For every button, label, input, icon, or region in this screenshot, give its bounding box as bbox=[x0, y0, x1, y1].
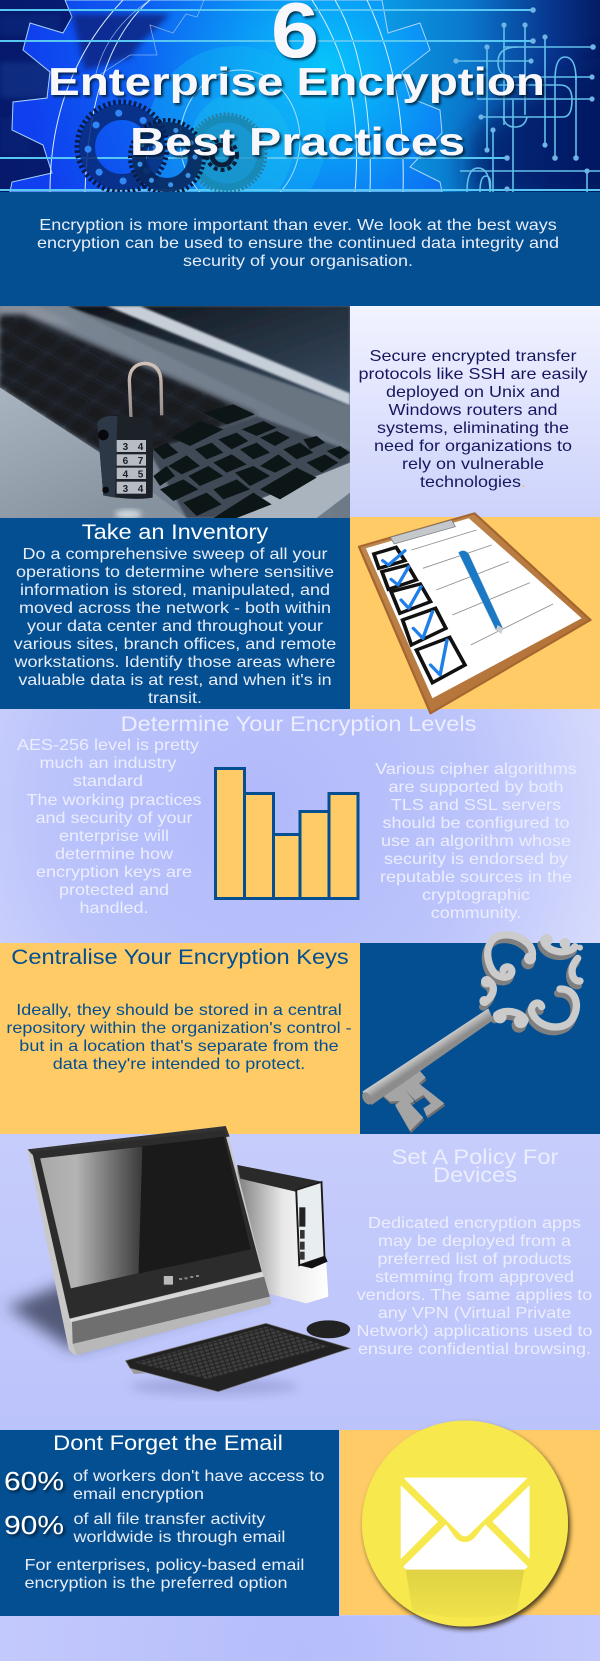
left text continued bbox=[27, 791, 201, 917]
stat: 60%: 60% bbox=[4, 1466, 64, 1496]
closing text: For enterprises, policy-based email bbox=[24, 1556, 304, 1574]
heading: Take an Inventory bbox=[82, 520, 269, 544]
body text: repository within the organization's control - bbox=[6, 1019, 352, 1037]
right text: reputable sources in the bbox=[380, 868, 572, 886]
closing text bbox=[24, 1556, 304, 1592]
bar chart bbox=[216, 768, 358, 898]
stat: 60% bbox=[4, 1466, 324, 1503]
keyboard bbox=[126, 1323, 350, 1392]
panel: email icon background bbox=[340, 1430, 600, 1615]
left text continued: and security of your bbox=[36, 809, 193, 827]
panel: take an inventory bbox=[0, 518, 350, 709]
right text: TLS and SSL servers bbox=[391, 796, 561, 814]
body text: workstations. Identify those areas where bbox=[13, 653, 335, 671]
stat: 90%: of all file transfer activity bbox=[74, 1510, 266, 1528]
right text bbox=[375, 760, 577, 922]
left text: much an industry bbox=[40, 754, 177, 772]
body text: transit. bbox=[148, 689, 202, 707]
icon: padlock: 34 bbox=[123, 442, 144, 453]
heading: Dont Forget the Email bbox=[53, 1431, 283, 1455]
panel: intro bbox=[0, 192, 600, 306]
intro text: encryption can be used to ensure the continued data integrity and bbox=[37, 234, 559, 252]
body text: operations to determine where sensitive bbox=[16, 563, 334, 581]
panel: centralise keys bbox=[0, 943, 360, 1134]
panel: encrypted transfer text bbox=[350, 306, 600, 518]
title: Best Practices bbox=[130, 121, 465, 164]
hero banner bbox=[0, 0, 600, 192]
bright edge streak bbox=[107, 306, 350, 405]
right text: Various cipher algorithms bbox=[375, 760, 577, 778]
right text: are supported by both bbox=[389, 778, 563, 796]
heading: Determine Your Encryption Levels bbox=[121, 712, 476, 736]
stat: 90% bbox=[4, 1510, 285, 1546]
body text bbox=[6, 1001, 352, 1073]
stat: 90%: worldwide is through email bbox=[72, 1528, 285, 1546]
left text continued: protected and bbox=[59, 881, 169, 899]
icon: envelope badge bbox=[362, 1420, 568, 1626]
intro text bbox=[37, 216, 559, 270]
body text: stemming from approved bbox=[375, 1268, 574, 1286]
body text: your data center and throughout your bbox=[27, 617, 323, 635]
stat: 60%: email encryption bbox=[73, 1485, 204, 1503]
body text: may be deployed from a bbox=[378, 1232, 572, 1250]
blurred keyboard bbox=[0, 314, 257, 453]
icon: large gear bbox=[10, 0, 442, 192]
body text bbox=[357, 1214, 592, 1358]
body text: any VPN (Virtual Private bbox=[378, 1304, 571, 1322]
mouse bbox=[307, 1320, 350, 1338]
body text: Do a comprehensive sweep of all your bbox=[23, 545, 328, 563]
icon: padlock: 67 bbox=[123, 456, 144, 467]
icon: small dark gears bbox=[77, 102, 266, 194]
panel: encrypted transfer text: need for organizations to bbox=[374, 437, 572, 455]
heading bbox=[392, 1145, 559, 1187]
left text continued: The working practices bbox=[27, 791, 201, 809]
body text: Network) applications used to bbox=[357, 1322, 592, 1340]
body text: data they're intended to protect. bbox=[53, 1055, 305, 1073]
body text: various sites, branch offices, and remote bbox=[14, 635, 336, 653]
sharp key well bbox=[150, 416, 350, 518]
panel: encrypted transfer text: deployed on Unix and bbox=[386, 383, 560, 401]
icon: padlock: 45 bbox=[123, 469, 144, 480]
heading: Centralise Your Encryption Keys bbox=[11, 945, 349, 969]
body text: information is stored, manipulated, and bbox=[20, 581, 330, 599]
body text: vendors. The same applies to bbox=[357, 1286, 592, 1304]
body text: ensure confidential browsing. bbox=[358, 1340, 591, 1358]
left text continued: enterprise will bbox=[59, 827, 169, 845]
panel: padlock photo bbox=[0, 306, 350, 519]
tower bbox=[237, 1165, 328, 1303]
left text continued: determine how bbox=[55, 845, 174, 863]
laptop lid bbox=[67, 306, 350, 406]
dark bottom right bbox=[470, 60, 600, 205]
right text: cryptographic bbox=[422, 886, 530, 904]
icon: clipboard bbox=[359, 513, 591, 713]
icon: padlock bbox=[97, 363, 162, 499]
body text: but in a location that's separate from the bbox=[19, 1037, 339, 1055]
body text bbox=[13, 545, 336, 707]
body text: moved across the network - both within bbox=[19, 599, 331, 617]
right text: security is endorsed by bbox=[384, 850, 568, 868]
panel: encrypted transfer text: Secure encrypted transfer bbox=[370, 347, 577, 365]
panel: determine encryption levels bbox=[0, 709, 600, 943]
body text: Ideally, they should be stored in a central bbox=[16, 1001, 342, 1019]
left text bbox=[17, 736, 199, 790]
intro text: Encryption is more important than ever. We look at the best ways bbox=[39, 216, 557, 234]
body text: valuable data is at rest, and when it's in bbox=[18, 671, 332, 689]
panel: encrypted transfer text: rely on vulnerable bbox=[402, 455, 544, 473]
body text: preferred list of products bbox=[378, 1250, 571, 1268]
left text: standard bbox=[73, 772, 143, 790]
circuit lines bbox=[455, 25, 600, 192]
monitor bbox=[28, 1126, 270, 1355]
right text: should be configured to bbox=[383, 814, 569, 832]
panel: encrypted transfer text: systems, eliminating the bbox=[377, 419, 569, 437]
icon: key bbox=[360, 934, 583, 1133]
title bbox=[48, 0, 545, 164]
heading: Devices bbox=[433, 1163, 517, 1187]
left text: AES-256 level is pretty bbox=[17, 736, 199, 754]
closing text: encryption is the preferred option bbox=[24, 1574, 287, 1592]
bottom band bbox=[0, 1616, 600, 1661]
panel: set a policy for devices bbox=[0, 1134, 600, 1430]
left text continued: handled. bbox=[79, 899, 149, 917]
heading: Set A Policy For bbox=[392, 1145, 559, 1169]
panel: key bbox=[360, 934, 600, 1134]
stat: 60%: of workers don't have access to bbox=[73, 1467, 324, 1485]
icon: padlock: 34 bbox=[123, 484, 144, 495]
panel: dont forget the email bbox=[0, 1430, 339, 1616]
stat: 90%: 90% bbox=[4, 1510, 64, 1540]
title: Enterprise Encryption bbox=[48, 61, 545, 104]
panel: clipboard bbox=[350, 513, 600, 713]
laptop palm rest bbox=[0, 388, 187, 518]
intro text: security of your organisation. bbox=[183, 252, 413, 270]
right text: use an algorithm whose bbox=[381, 832, 571, 850]
panel: encrypted transfer text: technologies. bbox=[420, 473, 526, 491]
panel: encrypted transfer text: protocols like SSH are easily bbox=[359, 365, 588, 383]
body text: Dedicated encryption apps bbox=[368, 1214, 581, 1232]
right text: community. bbox=[431, 904, 521, 922]
panel: encrypted transfer text: Windows routers and bbox=[389, 401, 557, 419]
icon: desktop computer bbox=[8, 1126, 350, 1395]
left text continued: encryption keys are bbox=[36, 863, 192, 881]
